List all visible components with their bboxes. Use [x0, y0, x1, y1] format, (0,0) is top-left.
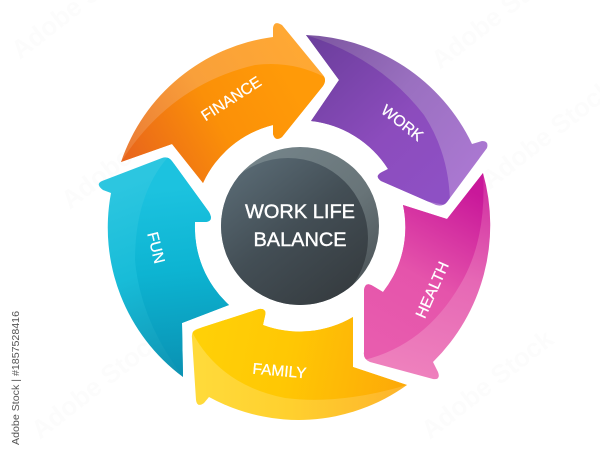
fun darker band — [135, 157, 235, 377]
center hub: BALANCE — [254, 230, 346, 251]
hub inner disc — [221, 158, 368, 305]
family darker band — [192, 300, 407, 400]
label: work: WORK — [378, 102, 427, 145]
arrow: work — [306, 35, 488, 206]
stock id text: Adobe Stock | #1857528416 — [10, 311, 22, 445]
work darker band — [300, 35, 450, 206]
center hub — [221, 147, 379, 305]
health darker band — [355, 173, 484, 360]
finance darker band — [121, 64, 330, 190]
label: fun: FUN — [143, 230, 167, 265]
arrow: finance — [121, 23, 325, 183]
arrow: health — [364, 173, 490, 380]
label: family: FAMILY — [252, 361, 307, 382]
label: finance: FINANCE — [198, 74, 265, 125]
arrow: fun — [98, 157, 229, 377]
label: health: HEALTH — [413, 259, 453, 321]
hub label: WORK LIFE — [245, 202, 355, 223]
arrow: family — [192, 308, 407, 420]
